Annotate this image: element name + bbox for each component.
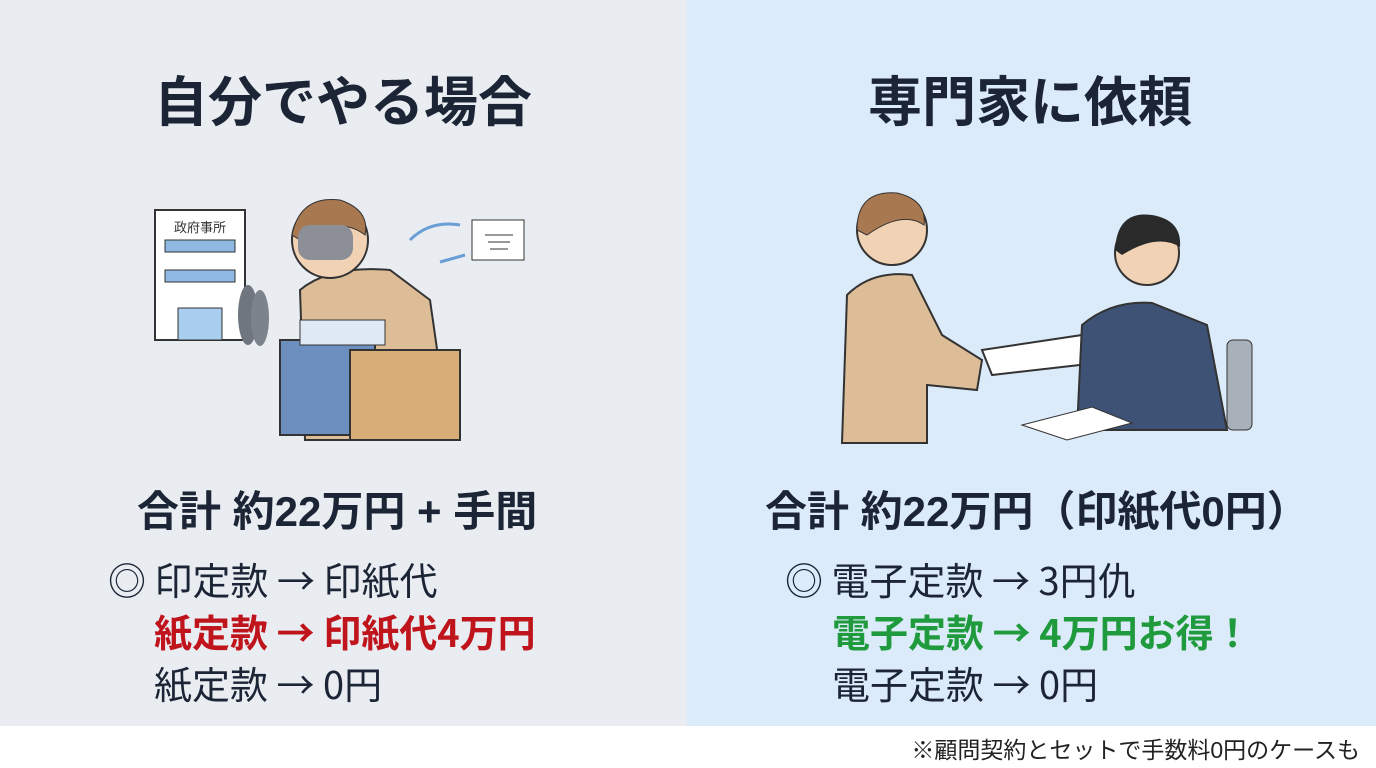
footnote: ※顧問契約とセットで手数料0円のケースも <box>911 737 1360 763</box>
title: expert: 専門家に依頼 <box>868 73 1192 133</box>
illustration: stressed man with documents: 政府事所 <box>174 217 226 236</box>
list: self items: 紙定款 → 0円 <box>154 655 382 710</box>
illustration: handing document to expert <box>840 192 1252 444</box>
list: self items <box>108 551 536 710</box>
subheading: self total: 合計 約22万円 + 手間 <box>137 488 537 535</box>
list: expert items <box>785 551 1252 710</box>
list: expert items: 電子定款 → 0円 <box>832 655 1098 710</box>
panel: self <box>0 0 687 726</box>
list: self items: ◎ 印定款 → 印紙代 <box>108 551 438 606</box>
illustration: stressed man with documents <box>154 199 524 441</box>
subheading: expert total: 合計 約22万円（印紙代0円） <box>765 488 1309 535</box>
list: expert items: ◎ 電子定款 → 3円仇 <box>785 551 1136 606</box>
list: self items: 紙定款 → 印紙代4万円 <box>154 603 536 658</box>
panel: expert <box>687 0 1376 726</box>
title: self: 自分でやる場合 <box>154 73 532 133</box>
list: expert items: 電子定款 → 4万円お得！ <box>832 603 1252 658</box>
